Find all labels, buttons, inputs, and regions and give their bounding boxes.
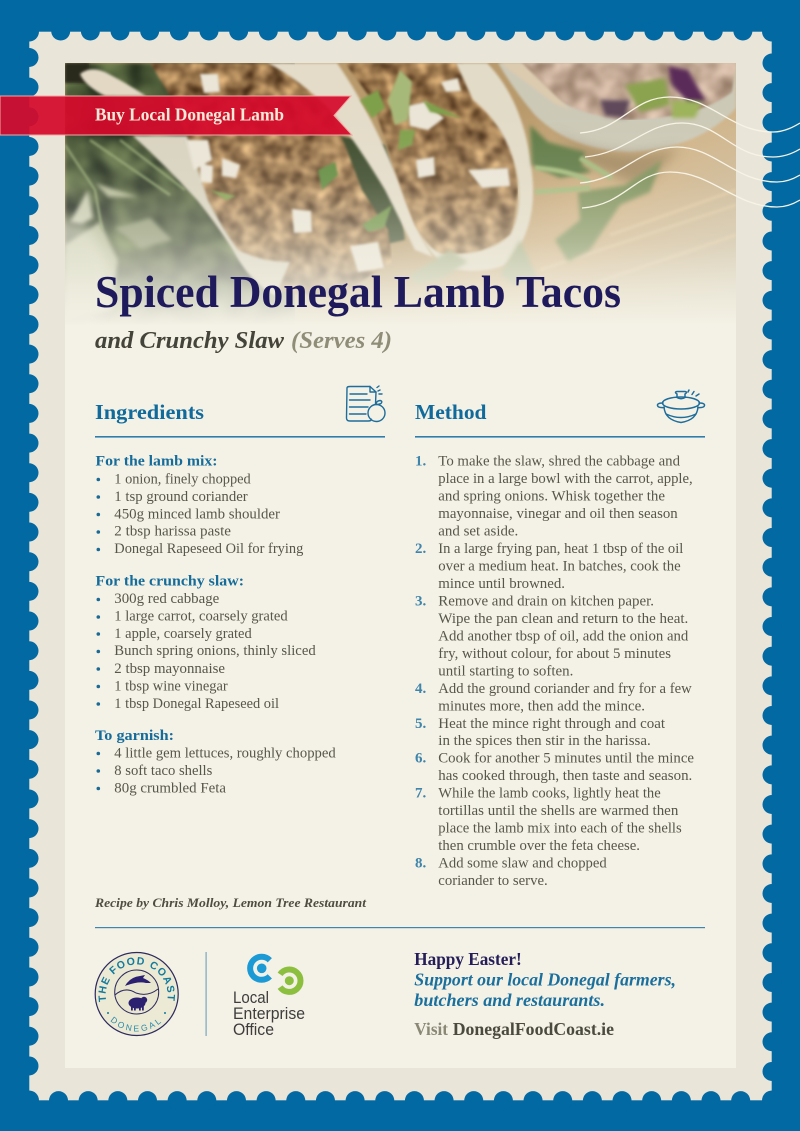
fish silhouette [125,975,151,986]
step text: then crumble over the feta cheese. [438,838,640,854]
garnish list: To garnish: [95,728,174,744]
ribbon banner [0,96,352,135]
garnish list: 8 soft taco shells [114,763,213,779]
step text: Cook for another 5 minutes until the mince [438,751,694,767]
step text: To make the slaw, shred the cabbage and [438,454,681,470]
step text: place the lamb mix into each of the shells [438,821,682,837]
lamb mix list: 1 onion, finely chopped [114,471,251,487]
panel: method [415,390,705,889]
logo: The Food Coast Donegal: DONEGAL [110,1016,162,1032]
panel: ingredients [95,386,385,796]
step text: fry, without colour, for about 5 minutes [438,646,671,662]
step text [438,454,694,889]
recipe credit: Recipe by Chris Molloy, Lemon Tree Restaurant [94,895,366,910]
garnish list: 80g crumbled Feta [114,780,227,796]
lamb mix list: 1 tsp ground coriander [114,489,248,505]
call to action text: butchers and restaurants. [414,990,605,1010]
crunchy slaw list: Bunch spring onions, thinly sliced [114,643,316,659]
photo fade to cream [65,135,736,326]
step numbers: 2. [415,541,426,557]
crunchy slaw list [96,574,316,712]
lamb mix list: 2 tbsp harissa paste [114,524,231,540]
crunchy slaw list: 1 apple, coarsely grated [114,626,252,642]
board grain highlights [687,190,734,210]
ingredients rule [95,436,385,438]
coriander on the board [530,125,662,262]
footer rule [95,927,705,928]
step numbers: 4. [415,681,426,697]
step text: and spring onions. Whisk together the [438,489,665,505]
taco one back shell [268,63,433,257]
coriander stems [535,158,612,192]
step text: In a large frying pan, heat 1 tbsp of the oil [438,541,683,557]
crunchy slaw list: 300g red cabbage [114,591,219,607]
step numbers: 3. [415,594,426,610]
call to action text: Happy Easter! [414,949,522,969]
step text: tortillas until the shells are warmed then [438,803,679,819]
step text: coriander to serve. [438,873,548,889]
step numbers: 5. [415,716,426,732]
step text: Wipe the pan clean and return to the heat. [438,611,688,627]
taco one lamb filling [150,63,392,298]
step text: mayonnaise, vinegar and oil then season [438,506,678,522]
logo wordmark: Enterprise [233,1005,305,1023]
method heading: Method [415,400,487,424]
ingredients heading: Ingredients [95,400,204,424]
taco two lamb filling [345,63,518,256]
step text: until starting to soften. [438,663,573,679]
subtitle [95,328,392,354]
subtitle: and Crunchy Slaw [95,328,285,354]
crunchy slaw list: 2 tbsp mayonnaise [114,661,225,677]
step numbers: 8. [415,856,426,872]
blue ring mark [250,957,270,980]
crunchy slaw list: 1 tbsp Donegal Rapeseed oil [114,696,279,712]
slaw in the bowl [520,63,736,120]
slaw colours [600,66,705,118]
green slaw pieces [210,70,462,232]
serving bowl [498,63,736,152]
lamb mix list: 450g minced lamb shoulder [114,506,280,522]
wooden board [65,63,736,326]
cream content panel [65,63,736,1068]
step text: Add the ground coriander and fry for a few [438,681,692,697]
step text: Add another tbsp of oil, add the onion and [438,628,689,644]
step text: and set aside. [438,524,518,540]
step text: Add some slaw and chopped [438,856,607,872]
call to action text: Support our local Donegal farmers, [414,970,676,990]
lamb mix list: Donegal Rapeseed Oil for frying [114,541,303,557]
green ring mark [280,969,300,992]
sheep silhouette [128,997,147,1010]
dark corner [65,63,89,83]
title: Spiced Donegal Lamb Tacos [95,267,621,317]
call to action text [414,949,676,1039]
subtitle: (Serves 4) [291,328,392,354]
left edge fade [65,214,107,298]
step text: Remove and drain on kitchen paper. [438,594,654,610]
bullets [96,478,100,790]
taco one top shell tip [80,69,146,96]
photo: lamb tacos on a wooden board [65,63,736,320]
logo wordmark: Local [233,989,269,1007]
logo ring text: THE FOOD COAST [98,957,176,1002]
garnish list [95,728,336,796]
step text: in the spices then stir in the harissa. [438,733,651,749]
crunchy slaw list: For the crunchy slaw: [96,574,244,590]
taco two shell [420,63,533,271]
call to action text: Visit [414,1019,448,1039]
step numbers: 1. [415,454,426,470]
logo: Local Enterprise Office [233,957,305,1039]
bowl shadow on board [564,135,678,184]
lamb mix list [96,454,303,557]
step text: over a medium heat. In batches, cook the [438,558,681,574]
crunchy slaw list: 1 large carrot, coarsely grated [114,608,288,624]
step numbers: 6. [415,751,426,767]
logo wordmark: Office [233,1021,274,1039]
step text: has cooked through, then taste and season. [438,768,692,784]
step numbers [415,454,426,872]
ribbon banner: Buy Local Donegal Lamb [95,104,284,124]
step text: While the lamb cooks, lightly heat the [438,786,661,802]
dark greens between tacos [335,135,405,250]
step text: Heat the mince right through and coat [438,716,665,732]
logo divider [206,952,207,1036]
step text: minutes more, then add the mince. [438,698,645,714]
feta chunks [186,74,510,272]
step text: place in a large bowl with the carrot, apple, [438,471,693,487]
garnish list: 4 little gem lettuces, roughly chopped [114,745,336,761]
logo: The Food Coast Donegal [94,952,179,1036]
step numbers: 7. [415,786,426,802]
call to action text: DonegalFoodCoast.ie [453,1019,614,1039]
leaf garnish at taco base [414,240,536,284]
bowl spoon handle [502,63,566,108]
icon: recipe page and apple [346,386,385,422]
taco one front shell [133,136,290,296]
step text: mince until browned. [438,576,565,592]
postmark wavy lines [580,97,800,208]
method rule [415,436,705,438]
lamb mix list: For the lamb mix: [96,454,218,470]
herb stems [65,140,185,230]
icon: cooking pot [657,390,705,422]
logo wordmark [233,989,305,1039]
left herbs [65,63,295,326]
crunchy slaw list: 1 tbsp wine vinegar [114,678,228,694]
pale herb leaves [65,183,172,320]
